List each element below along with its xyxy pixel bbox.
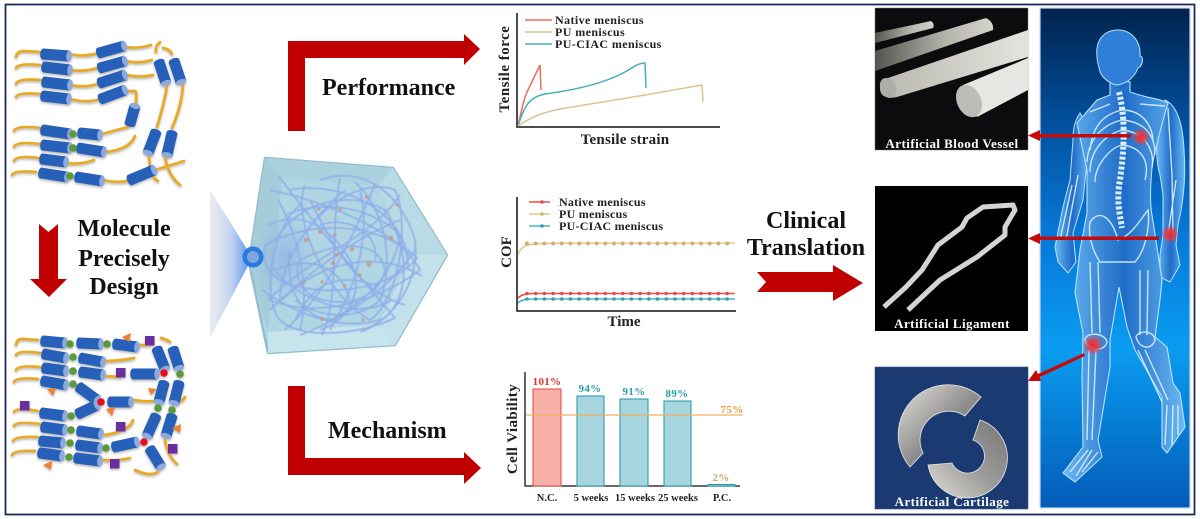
arrow: chest to blood vessel (1028, 130, 1131, 141)
legend: Native meniscus (559, 195, 646, 209)
caption: Artificial Ligament (894, 316, 1010, 331)
value labels: 75% (721, 404, 743, 416)
value labels: 101% (533, 376, 561, 388)
pain glow: knee (1083, 335, 1103, 355)
arm bones (1060, 108, 1176, 240)
value labels: 89% (666, 388, 688, 400)
heading: clinical translation (747, 208, 865, 261)
category labels: P.C. (713, 493, 732, 504)
left arm (1055, 113, 1090, 273)
legend (525, 13, 662, 51)
beam cone (210, 190, 250, 338)
pain glow: chest (1132, 128, 1150, 146)
cube body (249, 158, 447, 353)
heading: mechanism: Mechanism (328, 418, 447, 444)
category labels: N.C. (537, 493, 558, 504)
arrow to performance (288, 34, 480, 131)
nozzle bead (242, 246, 264, 268)
COF chart (499, 195, 736, 330)
category labels: 25 weeks (658, 493, 698, 504)
molecule diagram: before design (12, 42, 184, 185)
knee joints (1085, 332, 1155, 349)
axis labels: Tensile force (497, 26, 513, 112)
legend: Native meniscus (555, 13, 644, 27)
heading: molecule precisely design (77, 216, 171, 300)
foot bones (1070, 405, 1178, 476)
caption: Artificial Cartilage (895, 494, 1009, 509)
arrow to mechanism (288, 386, 481, 484)
axis label: Cell Viability (505, 384, 521, 474)
panel: human body (1040, 8, 1190, 508)
heading: molecule precisely design: Design (89, 274, 159, 300)
rib cage (1087, 104, 1165, 182)
legend: PU meniscus (555, 25, 625, 39)
head (1097, 30, 1142, 85)
legend (529, 195, 663, 233)
caption: Artificial Blood Vessel (885, 136, 1019, 151)
series (518, 243, 735, 303)
value labels: 94% (579, 383, 601, 395)
hydrogel cube (249, 158, 447, 353)
COF chart: Time (607, 314, 641, 330)
photo: artificial cartilage (875, 367, 1028, 509)
polymer fibre tangle (262, 176, 422, 335)
molecule diagram: after design (12, 333, 185, 474)
tensile chart: Tensile strain (581, 132, 670, 148)
category labels (537, 493, 732, 504)
arrow: knee to cartilage (1028, 353, 1085, 381)
pelvis (1089, 210, 1148, 262)
value labels (533, 376, 743, 484)
legend: PU meniscus (559, 207, 627, 221)
curves (518, 63, 703, 126)
photo: artificial ligament (875, 186, 1028, 331)
axes (517, 13, 720, 127)
threshold line (526, 414, 743, 416)
value labels: 2% (712, 472, 730, 484)
leg bones (1087, 262, 1168, 440)
cell viability bar chart (505, 372, 743, 504)
heading: molecule precisely design: Precisely (78, 246, 170, 272)
tensile chart (497, 13, 720, 148)
axis labels: COF (499, 236, 515, 268)
spine (1118, 92, 1124, 228)
heading: molecule precisely design: Molecule (77, 216, 171, 242)
right arm (1157, 100, 1185, 282)
clinical translation arrow (757, 265, 863, 301)
heading: clinical translation: Translation (747, 235, 865, 261)
value labels: 91% (623, 386, 645, 398)
category labels: 5 weeks (574, 493, 608, 504)
category labels: 15 weeks (615, 493, 655, 504)
legend: PU-CIAC meniscus (555, 37, 662, 51)
down arrow (30, 224, 67, 297)
legend: PU-CIAC meniscus (559, 219, 663, 233)
pain glow: wrist (1161, 225, 1179, 243)
heading: performance: Performance (322, 75, 456, 101)
heading: clinical translation: Clinical (766, 208, 846, 234)
photo: artificial blood vessel (875, 8, 1028, 151)
axes (525, 372, 740, 486)
arrow: wrist to ligament (1028, 233, 1159, 244)
torso and legs (1063, 78, 1185, 482)
bars (533, 389, 561, 486)
embedded particles (302, 195, 399, 322)
axes (517, 197, 736, 311)
